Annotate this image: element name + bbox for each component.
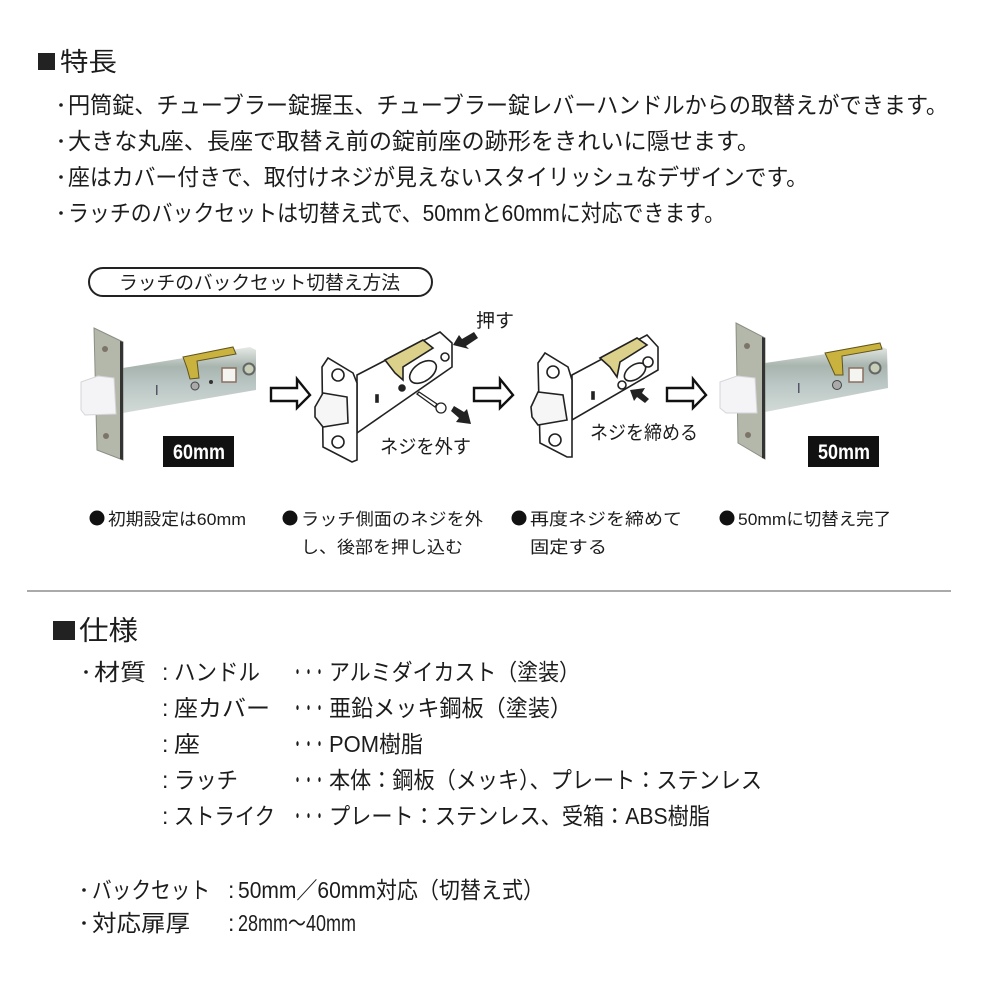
specification table: : xyxy=(162,803,168,829)
label: remove screw: ネジを外す xyxy=(380,436,471,458)
specification table: ストライク xyxy=(174,803,275,829)
backset switching title pill: ラッチのバックセット切替え方法 xyxy=(119,272,400,294)
arrow: push xyxy=(453,332,478,349)
diagram: latch, screw tightened xyxy=(531,335,658,457)
specification table xyxy=(84,659,762,829)
heading: specifications: 仕様 xyxy=(79,616,138,646)
heading: features xyxy=(38,47,117,77)
specification table: ラッチ xyxy=(174,767,238,793)
latch photo: 50mm xyxy=(720,323,888,459)
backset switching title pill xyxy=(89,268,432,296)
backset and door thickness: 50mm／60mm対応（切替え式） xyxy=(238,877,544,903)
step captions xyxy=(90,510,891,557)
backset and door thickness: : xyxy=(228,910,234,936)
label: tighten screw: ネジを締める xyxy=(590,422,698,444)
heading: specifications xyxy=(53,616,138,646)
feature list: 円筒錠、チューブラー錠握玉、チューブラー錠レバーハンドルからの取替えができます。 xyxy=(68,92,948,118)
specification table: ・・・ xyxy=(292,731,325,757)
label: 60mm: 60mm xyxy=(173,441,225,464)
arrow: tighten xyxy=(630,388,649,403)
feature list xyxy=(59,92,948,226)
feature list: ラッチのバックセットは切替え式で、50mmと60mmに対応できます。 xyxy=(68,200,725,226)
specification table: 亜鉛メッキ鋼板（塗装） xyxy=(329,695,572,721)
backset and door thickness: バックセット xyxy=(92,877,210,903)
specification table: ・・・ xyxy=(292,659,325,685)
step captions: 50mmに切替え完了 xyxy=(738,510,891,529)
label: 60mm xyxy=(163,436,234,467)
backset and door thickness xyxy=(82,877,544,936)
arrow: step 2 xyxy=(474,379,513,408)
specification table: : xyxy=(162,731,168,757)
specification table: 本体：鋼板（メッキ）、プレート：ステンレス xyxy=(329,767,762,793)
backset and door thickness: 対応扉厚 xyxy=(92,910,190,936)
step captions: し、後部を押し込む xyxy=(301,538,463,557)
diagram: latch, screw removal xyxy=(315,332,452,462)
step captions: ラッチ側面のネジを外 xyxy=(301,510,483,529)
specification table: プレート：ステンレス、受箱：ABS樹脂 xyxy=(329,803,710,829)
backset and door thickness: : xyxy=(228,877,234,903)
specification table: : xyxy=(162,767,168,793)
specification table: POM樹脂 xyxy=(329,731,423,757)
step captions: 固定する xyxy=(530,538,607,557)
specification table: 座 xyxy=(174,731,200,757)
label: push: 押す xyxy=(476,310,514,332)
step captions: 初期設定は60mm xyxy=(108,510,246,529)
specification table: ・・・ xyxy=(292,767,325,793)
arrow: remove screw xyxy=(451,406,471,424)
icon: screw xyxy=(417,392,446,413)
label: 50mm xyxy=(808,436,879,467)
specification table: 材質 xyxy=(94,659,146,685)
step captions: 再度ネジを締めて xyxy=(530,510,682,529)
heading: features: 特長 xyxy=(60,47,117,77)
specification table: ・・・ xyxy=(292,695,325,721)
specification table: アルミダイカスト（塗装） xyxy=(329,659,580,685)
feature list: 大きな丸座、長座で取替え前の錠前座の跡形をきれいに隠せます。 xyxy=(68,128,760,154)
backset and door thickness: 28mm～40mm xyxy=(238,910,356,936)
label: 50mm: 50mm xyxy=(818,441,870,464)
specification table: : xyxy=(162,659,168,685)
latch photo: 60mm xyxy=(81,328,256,460)
arrow: step 1 xyxy=(271,379,310,408)
specification table: 座カバー xyxy=(174,695,270,721)
specification table: : xyxy=(162,695,168,721)
specification table: ハンドル xyxy=(174,659,260,685)
specification table: ・・・ xyxy=(292,803,325,829)
feature list: 座はカバー付きで、取付けネジが見えないスタイリッシュなデザインです。 xyxy=(68,164,808,190)
arrow: step 3 xyxy=(667,379,706,408)
